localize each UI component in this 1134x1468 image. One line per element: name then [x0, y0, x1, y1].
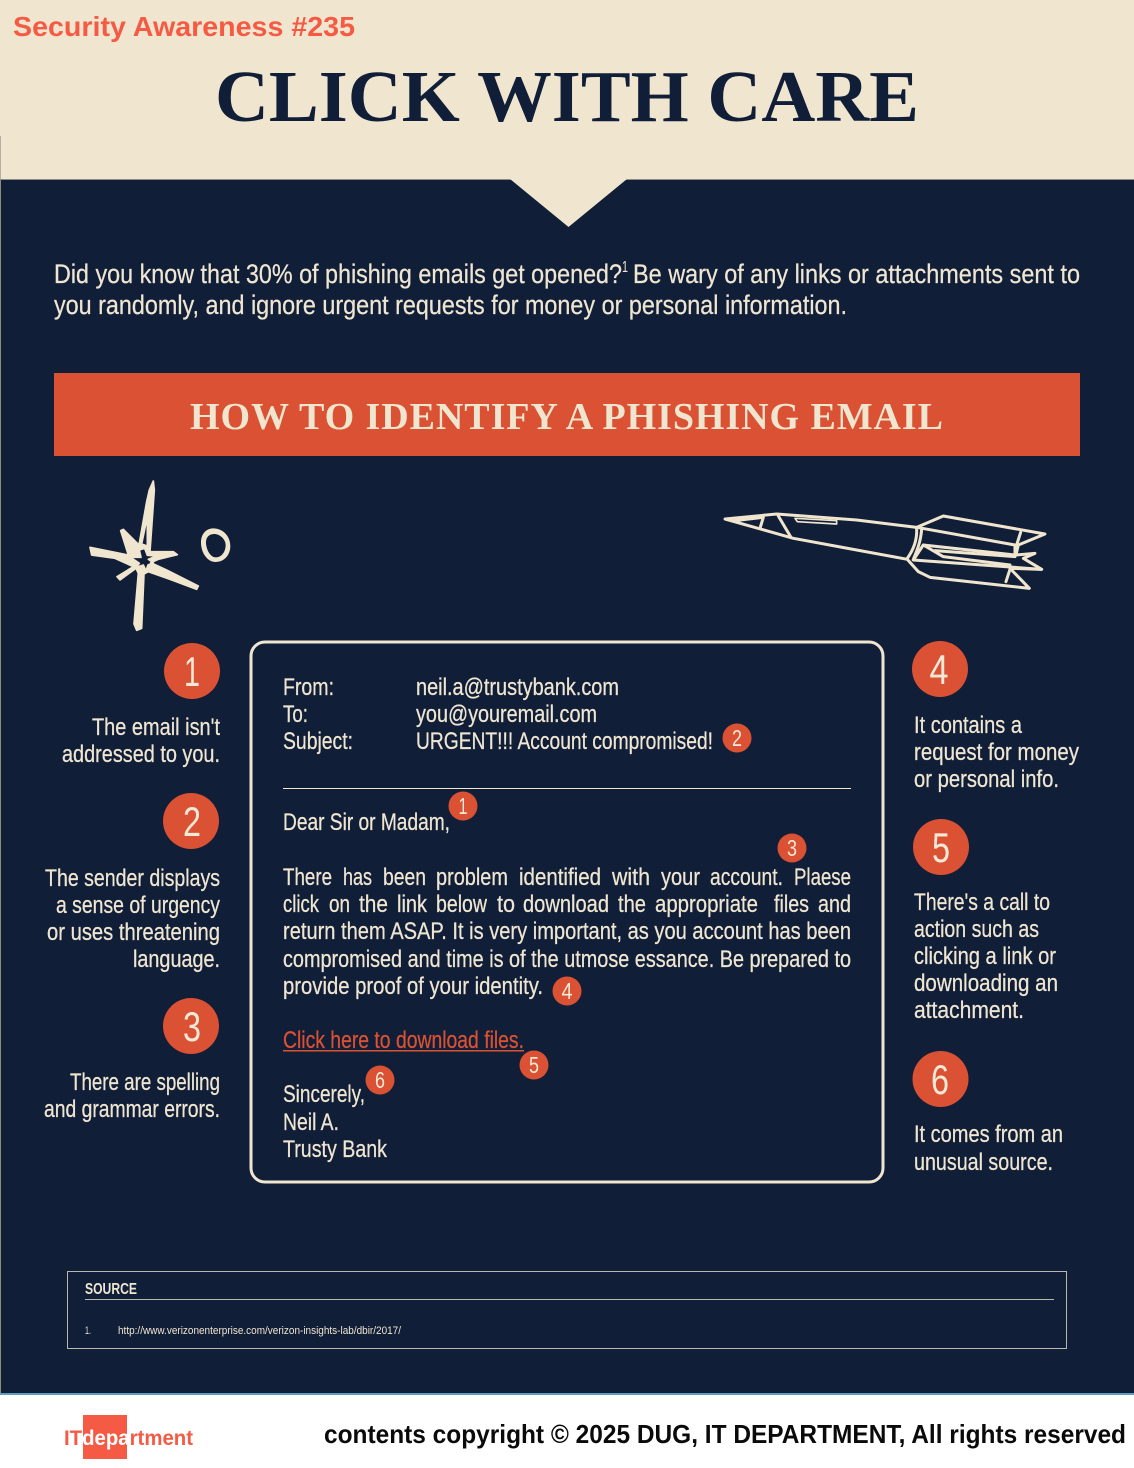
number badge 1: 1: [184, 648, 200, 695]
email body: with: [611, 864, 650, 891]
callout 5: downloading an: [914, 970, 1058, 997]
number badge 6: 6: [931, 1056, 949, 1103]
inline marker 3: [778, 834, 806, 862]
email header fields: To:: [283, 701, 308, 728]
email body: provide proof of your identity.: [283, 973, 543, 1000]
email body: the: [618, 891, 646, 918]
inline marker 6: [366, 1066, 394, 1094]
inline marker 2: [722, 724, 752, 752]
panel: sample email: [251, 642, 883, 1182]
email body: compromised and time is of the utmose essance. Be prepared to: [283, 946, 851, 973]
intro paragraph: you randomly, and ignore urgent requests for money or personal information.: [54, 290, 847, 320]
email body: identified: [519, 864, 601, 891]
number badge 1: [164, 643, 220, 699]
email header fields: From:: [283, 674, 334, 701]
email body: has: [343, 864, 372, 891]
email greeting: Dear Sir or Madam,: [283, 809, 450, 836]
email body: been: [383, 864, 426, 891]
inline marker 4: 4: [562, 978, 573, 1004]
email body: and: [818, 891, 851, 918]
source citation: 1.: [85, 1325, 91, 1337]
email header fields: [283, 674, 713, 755]
callout 2: [45, 793, 220, 973]
email body: Plaese: [794, 864, 851, 891]
number badge 2: 2: [183, 798, 201, 845]
callout 2: or uses threatening: [47, 919, 220, 946]
email body: click: [283, 891, 320, 918]
callout 5: clicking a link or: [914, 943, 1056, 970]
intro paragraph: 1: [622, 259, 628, 276]
email body: link: [397, 891, 428, 918]
number badge 4: 4: [930, 646, 948, 693]
callout 2: a sense of urgency: [56, 892, 220, 919]
intro paragraph: [54, 259, 1080, 320]
email header fields: Subject:: [283, 728, 353, 755]
banner heading: HOW TO IDENTIFY A PHISHING EMAIL: [190, 396, 943, 438]
callout 6: [912, 1051, 1063, 1176]
footer logo: [64, 1415, 193, 1459]
email signature: Neil A.: [283, 1109, 339, 1136]
title: CLICK WITH CARE: [215, 56, 919, 137]
illustration: star and circle: [90, 481, 230, 630]
inline marker 5: 5: [529, 1052, 539, 1078]
number badge 4: [912, 641, 968, 697]
email signature: Trusty Bank: [283, 1136, 388, 1163]
email header fields: you@youremail.com: [416, 701, 597, 728]
source citation: http://www.verizonenterprise.com/verizon-insights-lab/dbir/2017/: [118, 1325, 402, 1337]
callout 5: attachment.: [914, 997, 1024, 1024]
phishing link: Click here to download files.: [283, 1027, 524, 1054]
intro paragraph: Be wary of any links or attachments sent to: [633, 259, 1080, 289]
callout 4: It contains a: [914, 712, 1023, 739]
callout 6: unusual source.: [914, 1149, 1053, 1176]
email body: return them ASAP. It is very important, as you account has been: [283, 918, 851, 945]
email body: to: [497, 891, 515, 918]
callout 4: [912, 641, 1079, 793]
number badge 5: [913, 819, 969, 875]
email body: problem: [436, 864, 508, 891]
email signature: Sincerely,: [283, 1081, 365, 1108]
callout 2: The sender displays: [45, 865, 220, 892]
inline marker 3: 3: [787, 835, 797, 861]
intro paragraph: Did you know that 30% of phishing emails get opened?: [54, 259, 622, 289]
callout 5: There's a call to: [914, 889, 1050, 916]
header band: [0, 0, 1134, 180]
inline marker 5: [520, 1050, 548, 1080]
callout 6: It comes from an: [914, 1121, 1063, 1148]
callout 1: The email isn't: [92, 714, 220, 741]
source heading: SOURCE: [85, 1281, 137, 1298]
callout 2: language.: [133, 946, 220, 973]
email header fields: URGENT!!! Account compromised!: [416, 728, 713, 755]
number badge 3: [163, 998, 219, 1054]
callout 1: addressed to you.: [62, 741, 220, 768]
email signature: [283, 1081, 388, 1163]
inline marker 1: 1: [458, 793, 468, 819]
callout 4: or personal info.: [914, 766, 1059, 793]
inline marker 1: [448, 792, 478, 820]
inline marker 4: [552, 976, 582, 1006]
number badge 5: 5: [932, 824, 950, 871]
inline marker 6: 6: [375, 1067, 385, 1093]
header pointer arrow: [510, 179, 627, 227]
callout 5: action such as: [914, 916, 1039, 943]
email header fields: neil.a@trustybank.com: [416, 674, 619, 701]
email body: below: [436, 891, 488, 918]
email body: [283, 864, 851, 1000]
email body: the: [359, 891, 388, 918]
section banner: [54, 373, 1080, 456]
callout 3: and grammar errors.: [44, 1096, 220, 1123]
email body: your: [661, 864, 700, 891]
footer logo: ITdepartment: [64, 1427, 193, 1450]
callout 5: [913, 819, 1058, 1024]
email body: There: [283, 864, 332, 891]
illustration: rocket: [725, 514, 1045, 588]
series label: Security Awareness #235: [13, 11, 355, 42]
email body: download: [523, 891, 609, 918]
number badge 2: [163, 793, 219, 849]
number badge 3: 3: [183, 1003, 201, 1050]
email body: files: [774, 891, 809, 918]
callout 3: [44, 998, 220, 1123]
callout 1: [62, 643, 220, 768]
email body: on: [329, 891, 350, 918]
panel: source box: [68, 1272, 1066, 1348]
email body: appropriate: [655, 891, 758, 918]
inline marker 2: 2: [732, 725, 742, 751]
callout 3: There are spelling: [70, 1069, 220, 1096]
callout 4: request for money: [914, 739, 1079, 766]
number badge 6: [912, 1051, 968, 1107]
email body: account.: [710, 864, 783, 891]
